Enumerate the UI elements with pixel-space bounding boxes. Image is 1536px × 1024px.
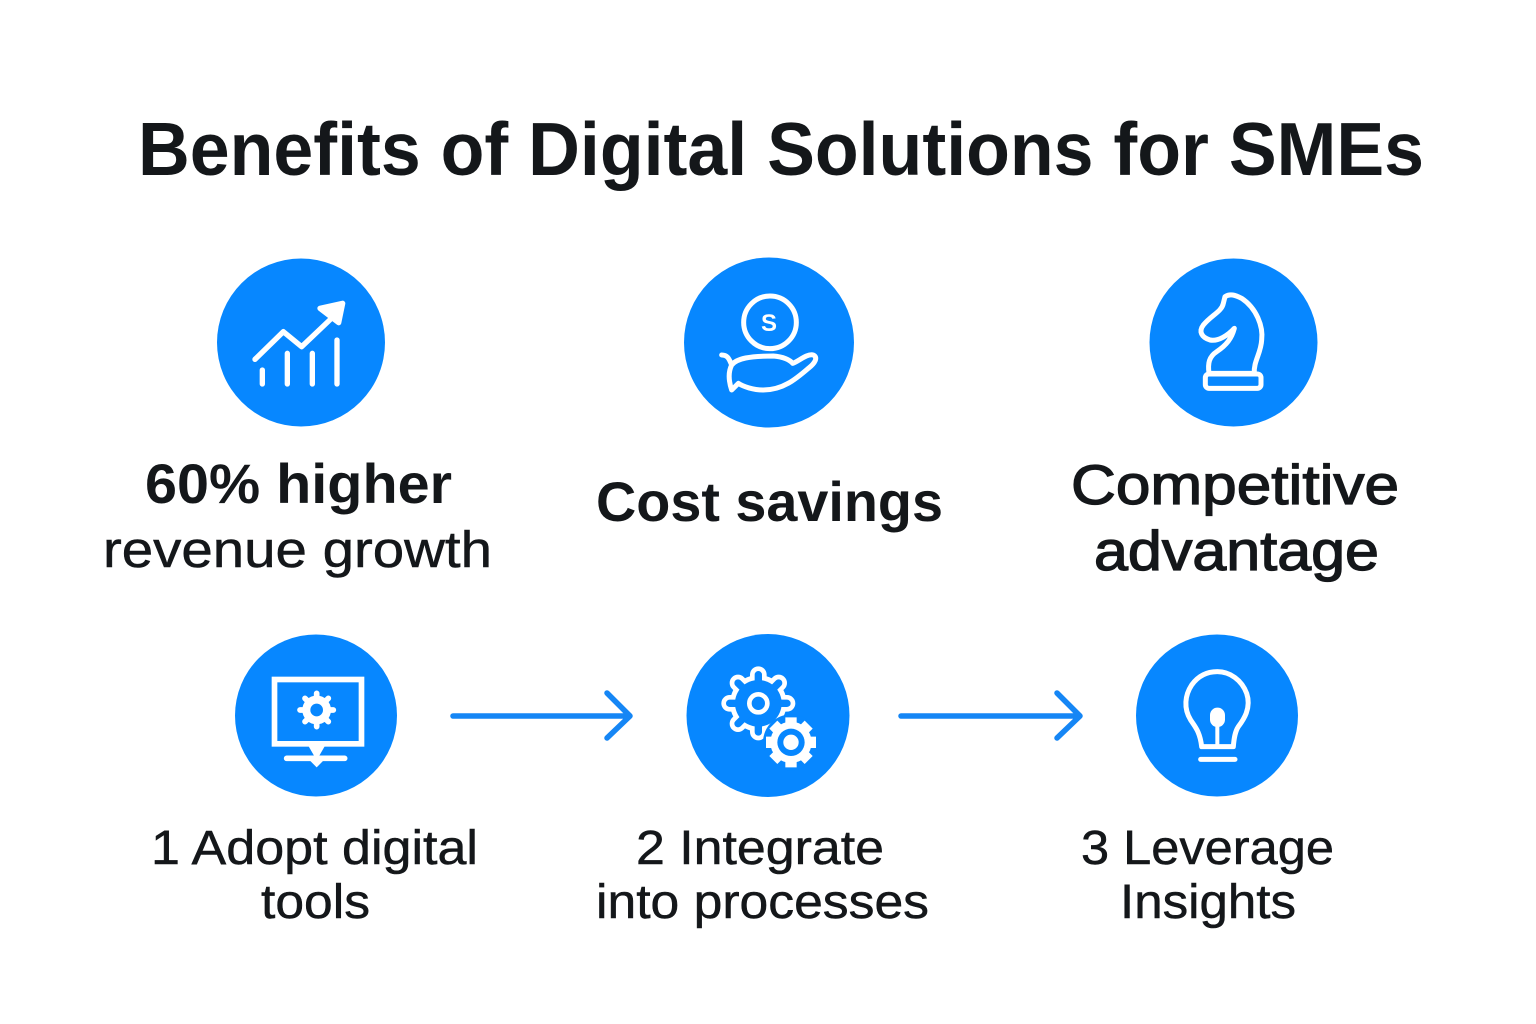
icon: monitor with gear bbox=[235, 634, 397, 796]
step 1: adopt digital tools bbox=[151, 634, 478, 929]
panel: revenue growth bbox=[103, 258, 492, 578]
icon: light bulb bbox=[1136, 634, 1298, 796]
icon: coin over hand: S bbox=[761, 310, 777, 337]
panel: competitive advantage bbox=[1071, 258, 1399, 582]
label: competitive advantage bbox=[1071, 453, 1399, 582]
label: 1 adopt digital tools bbox=[151, 822, 478, 929]
panel: cost savings bbox=[596, 258, 943, 533]
label: 2 integrate into processes: 2 Integrate bbox=[636, 822, 884, 875]
label: 3 leverage insights bbox=[1081, 822, 1334, 929]
label: revenue growth: revenue growth bbox=[103, 521, 492, 578]
label: competitive advantage: advantage bbox=[1094, 519, 1379, 582]
title: Benefits of Digital Solutions for SMEs bbox=[138, 107, 1424, 191]
icon: chess knight bbox=[1150, 258, 1318, 426]
icon: gears bbox=[686, 634, 850, 797]
icon: coin over hand bbox=[684, 258, 854, 428]
step 2: integrate into processes bbox=[596, 634, 929, 929]
step 3: leverage insights bbox=[1081, 634, 1334, 929]
label: 1 adopt digital tools: tools bbox=[261, 876, 370, 929]
arrow: step 2 to step 3 bbox=[901, 693, 1080, 738]
label: 2 integrate into processes: into processes bbox=[596, 876, 929, 929]
arrow: step 1 to step 2 bbox=[453, 693, 630, 738]
label: 3 leverage insights: Insights bbox=[1120, 876, 1296, 929]
label: 2 integrate into processes bbox=[596, 822, 929, 929]
label: competitive advantage: Competitive bbox=[1071, 453, 1399, 516]
label: 1 adopt digital tools: 1 Adopt digital bbox=[151, 822, 478, 875]
icon: rising chart bbox=[217, 258, 385, 426]
label: cost savings: Cost savings bbox=[596, 470, 943, 533]
stat: 60% higher: 60% higher bbox=[145, 452, 452, 515]
label: 3 leverage insights: 3 Leverage bbox=[1081, 822, 1334, 875]
